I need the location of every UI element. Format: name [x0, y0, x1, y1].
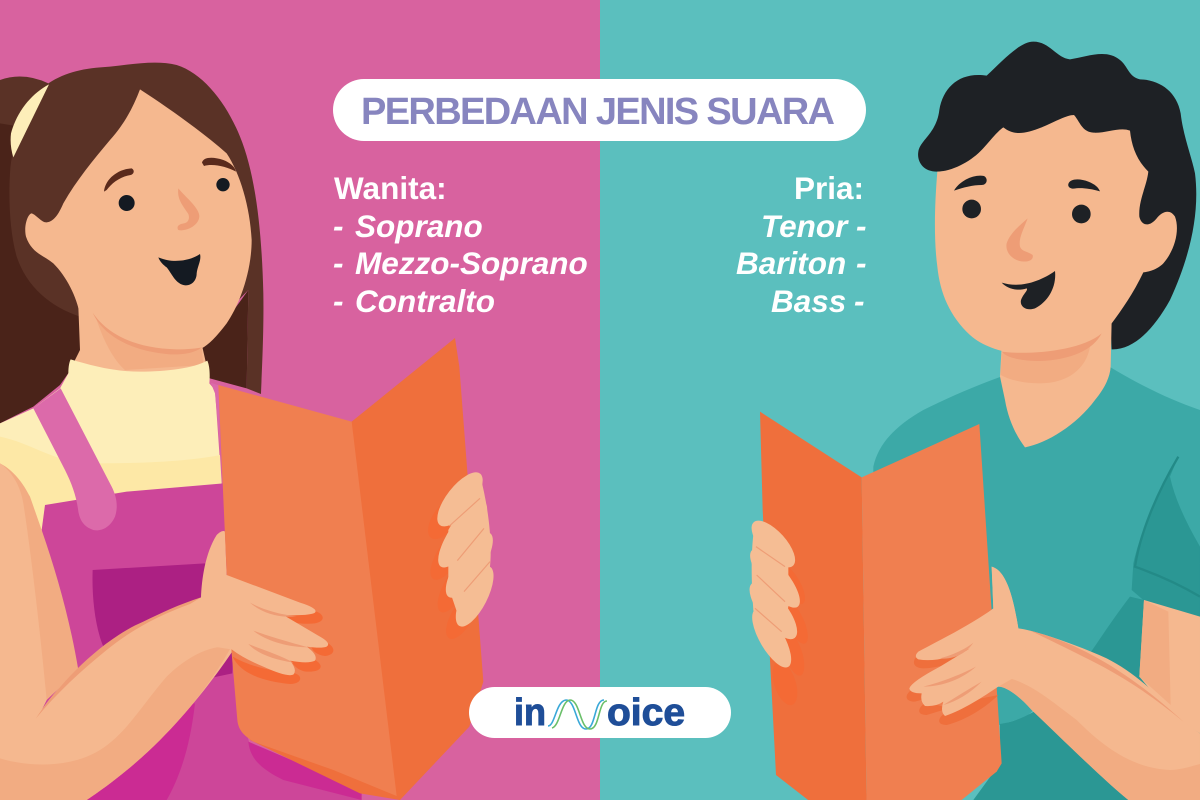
right hand creases: [449, 498, 490, 592]
man upper arm: [1139, 600, 1200, 733]
man open book: [741, 412, 1033, 800]
woman chin shadow: [93, 313, 202, 354]
text block: Pria voice types: Bariton: [736, 245, 846, 281]
woman main hair: [9, 63, 263, 394]
man eye right: [1072, 205, 1091, 223]
illustration: man singer head: [873, 42, 1200, 725]
woman mouth: [158, 254, 200, 285]
left hand back: [752, 523, 788, 662]
book right page: [250, 338, 483, 800]
illustration: woman singer body and book: [0, 338, 501, 800]
book left page: [760, 412, 867, 800]
overall strap: [33, 388, 117, 530]
woman ponytail top: [0, 77, 48, 127]
left hand palm and fingers: [213, 575, 328, 675]
left finger shadows: [233, 612, 333, 684]
man upper arm shade: [1139, 600, 1171, 705]
text block: Pria voice types: Tenor: [761, 208, 847, 244]
text block: Pria voice types: Pria:: [794, 170, 864, 206]
logo pill: [469, 687, 731, 738]
woman eyebrow left: [104, 168, 134, 192]
text block: Wanita voice types: -: [333, 283, 344, 319]
sweater lower shade: [0, 437, 222, 530]
forearm top edge shade: [36, 597, 201, 718]
right finger creases: [923, 643, 982, 705]
woman eye left: [119, 195, 135, 211]
right hand palm and fingers: [909, 567, 1033, 716]
woman eyebrow right: [202, 158, 236, 172]
text block: Wanita voice types: [333, 170, 588, 319]
woman forearm: [0, 531, 233, 800]
book right page: [862, 424, 1002, 800]
text block: Pria voice types: -: [856, 245, 866, 281]
logo wave: blue: [548, 700, 604, 729]
man sleeve: [1132, 457, 1200, 617]
text block: Pria voice types: [736, 170, 866, 319]
woman sweater: [0, 359, 222, 533]
illustration: woman singer head: [0, 63, 263, 423]
book left page: [218, 385, 397, 796]
left hand fingers: [741, 514, 808, 673]
woman face: [25, 89, 252, 351]
text block: Wanita voice types: Mezzo-Soprano: [355, 245, 588, 281]
left hand creases: [755, 547, 785, 632]
left finger creases: [248, 603, 308, 663]
forearm lower shade: [0, 646, 232, 800]
left hand finger shadows: [768, 558, 813, 708]
logo text: in: in: [514, 692, 546, 734]
woman neck shadow: [97, 320, 203, 370]
text block: Wanita voice types: Soprano: [355, 208, 483, 244]
right hand back: [448, 475, 491, 626]
right strap sliver: [211, 383, 220, 447]
logo wave: green: [552, 700, 607, 729]
logo text: oice: oice: [607, 692, 685, 734]
man forearm top shade: [1030, 631, 1183, 722]
man forearm lower shade: [997, 677, 1200, 800]
background: teal right half: [600, 0, 1200, 800]
man neck shadow: [1001, 347, 1090, 383]
man eyebrow left: [954, 176, 987, 191]
man forearm: [992, 567, 1200, 800]
sleeve fold lines: [1135, 457, 1200, 597]
woman headband: [11, 84, 49, 157]
man eyebrow right: [1068, 179, 1100, 191]
man eye left: [962, 200, 981, 218]
man shirt lower dark: [973, 597, 1200, 800]
woman back hair: [0, 117, 80, 423]
woman nose: [178, 188, 199, 230]
text block: Pria voice types: -: [856, 208, 866, 244]
text block: Pria voice types: -: [854, 283, 864, 319]
title text: PERBEDAAN JENIS SUARA: [361, 91, 835, 133]
woman neck: [68, 307, 208, 373]
illustration: man singer body and book: [741, 412, 1200, 800]
overall pocket: [92, 563, 233, 677]
right hand finger shadows: [421, 492, 483, 644]
man neck: [1000, 320, 1112, 447]
text block: Wanita voice types: -: [333, 245, 344, 281]
man chin shadow: [1002, 333, 1102, 361]
man mouth: [1002, 271, 1055, 309]
man hair: [918, 42, 1196, 349]
man shirt: [873, 367, 1200, 725]
right hand fingers: [429, 465, 501, 632]
background: pink left half: [0, 0, 600, 800]
overall skirt shadow left: [0, 703, 195, 800]
woman eye right: [216, 178, 230, 191]
text block: Wanita voice types: Contralto: [355, 283, 495, 319]
right finger shadows: [907, 657, 998, 725]
woman upper arm: [0, 463, 78, 747]
title pill: [333, 79, 866, 141]
book shadow on overall: [248, 742, 362, 800]
upper arm highlight: [0, 463, 47, 747]
woman right side back hair: [197, 290, 248, 388]
man face: [935, 115, 1177, 355]
text block: Wanita voice types: -: [333, 208, 344, 244]
woman overall bib: [0, 483, 362, 800]
man nose: [1006, 218, 1033, 262]
text block: Wanita voice types: Wanita:: [334, 170, 447, 206]
woman open book: [213, 338, 501, 800]
text block: Pria voice types: Bass: [771, 283, 846, 319]
